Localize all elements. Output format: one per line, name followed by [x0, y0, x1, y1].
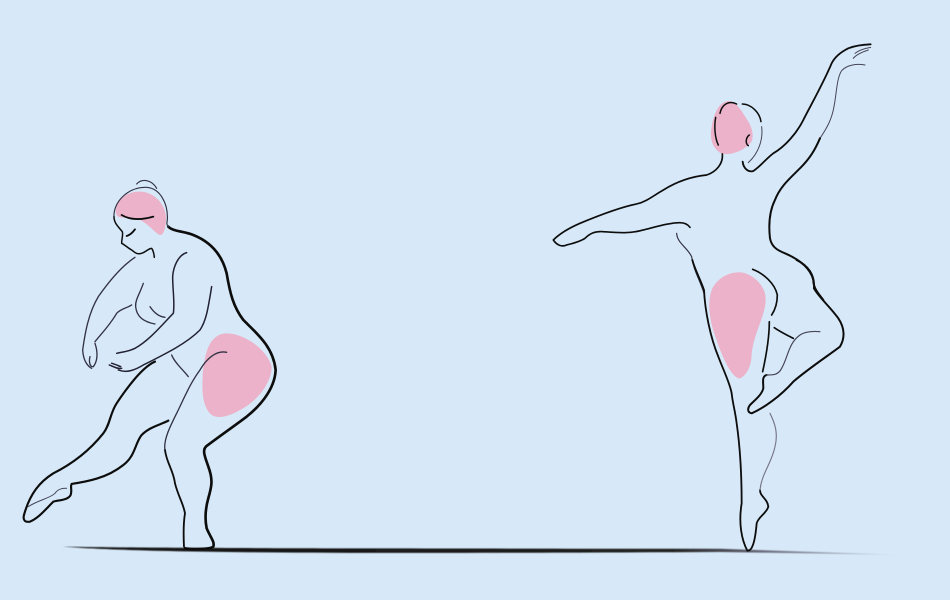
torso front — [677, 233, 704, 293]
floor line — [62, 546, 908, 555]
chest lines — [136, 283, 165, 324]
fingers and under-arm to back — [820, 47, 871, 138]
buttock and thigh lines — [753, 269, 793, 372]
head lines — [715, 103, 761, 146]
face profile — [114, 217, 154, 257]
highlight: left head — [116, 192, 166, 235]
raised leg inner — [767, 331, 820, 375]
highlight: right hip — [709, 272, 766, 379]
standing leg outer — [692, 260, 768, 551]
highlight: right head — [711, 101, 753, 154]
standing leg front — [165, 450, 185, 547]
brow and eye — [122, 215, 153, 236]
back outline — [769, 138, 823, 300]
right arm and hand — [109, 253, 212, 371]
raised leg — [748, 260, 844, 413]
belly and thigh lines — [165, 352, 227, 450]
dancer: right figure lower body — [692, 260, 844, 551]
dancer: right figure upper body — [553, 44, 871, 300]
left arm and hand — [83, 257, 135, 368]
raised leg top — [24, 362, 168, 522]
back and standing leg outline — [168, 227, 276, 549]
foot detail — [28, 488, 67, 507]
standing leg inner — [760, 413, 776, 490]
raised right arm — [743, 44, 871, 171]
head and bun outline — [114, 180, 168, 227]
left arm — [553, 154, 722, 246]
highlight: left hip — [202, 333, 272, 417]
hair back — [748, 127, 762, 163]
dancer: left figure — [24, 180, 276, 549]
